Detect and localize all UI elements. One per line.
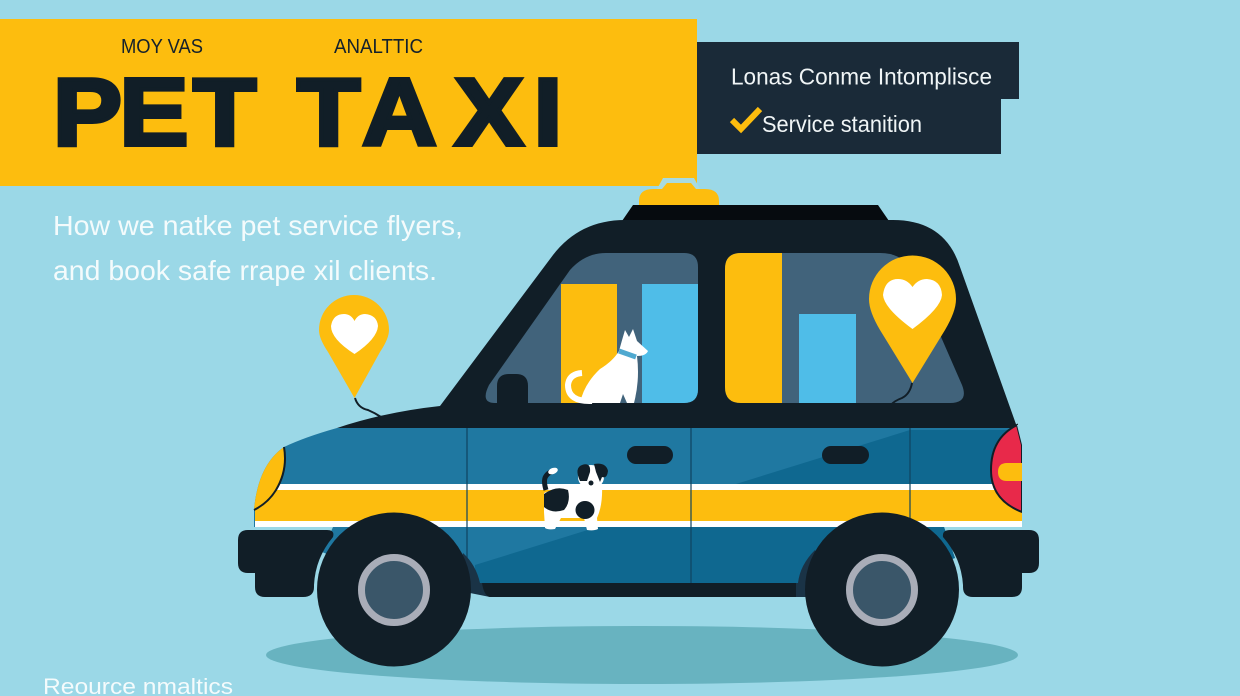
floor sill (455, 550, 830, 597)
icon: check mark (732, 109, 760, 129)
title banner: MOY VAS (121, 36, 203, 58)
taxi (238, 178, 1039, 666)
dark info panel: Lonas Conme Intomplisce (731, 64, 992, 90)
subtitle text: and book safe rrape xil clients. (53, 255, 437, 286)
icon: black and white dog (544, 464, 608, 530)
icon: large heart pin (869, 256, 956, 405)
ground shadow (266, 626, 1018, 684)
icon: small heart pin (319, 295, 389, 417)
title banner: ANALTTIC (334, 36, 423, 58)
door lines and handles (467, 428, 910, 584)
lower body (254, 427, 1022, 584)
seat headrest (497, 374, 528, 404)
tail light (991, 425, 1026, 515)
cab body (337, 220, 1017, 428)
body shade (475, 430, 1022, 584)
roof sign (622, 178, 889, 221)
rear wheel (805, 512, 959, 666)
subtitle text: How we natke pet service flyers, (53, 210, 463, 241)
yellow stripe (255, 484, 1022, 527)
front wheel (317, 512, 471, 666)
windows (486, 253, 964, 404)
headlight (254, 447, 285, 510)
dark info panel (697, 42, 1019, 154)
dark info panel: Service stanition (762, 111, 922, 137)
bumpers (238, 530, 1039, 597)
title banner (0, 19, 697, 186)
subtitle text (53, 210, 463, 286)
title banner: PET TAXI (53, 59, 562, 166)
icon: white cat in window (568, 329, 648, 403)
